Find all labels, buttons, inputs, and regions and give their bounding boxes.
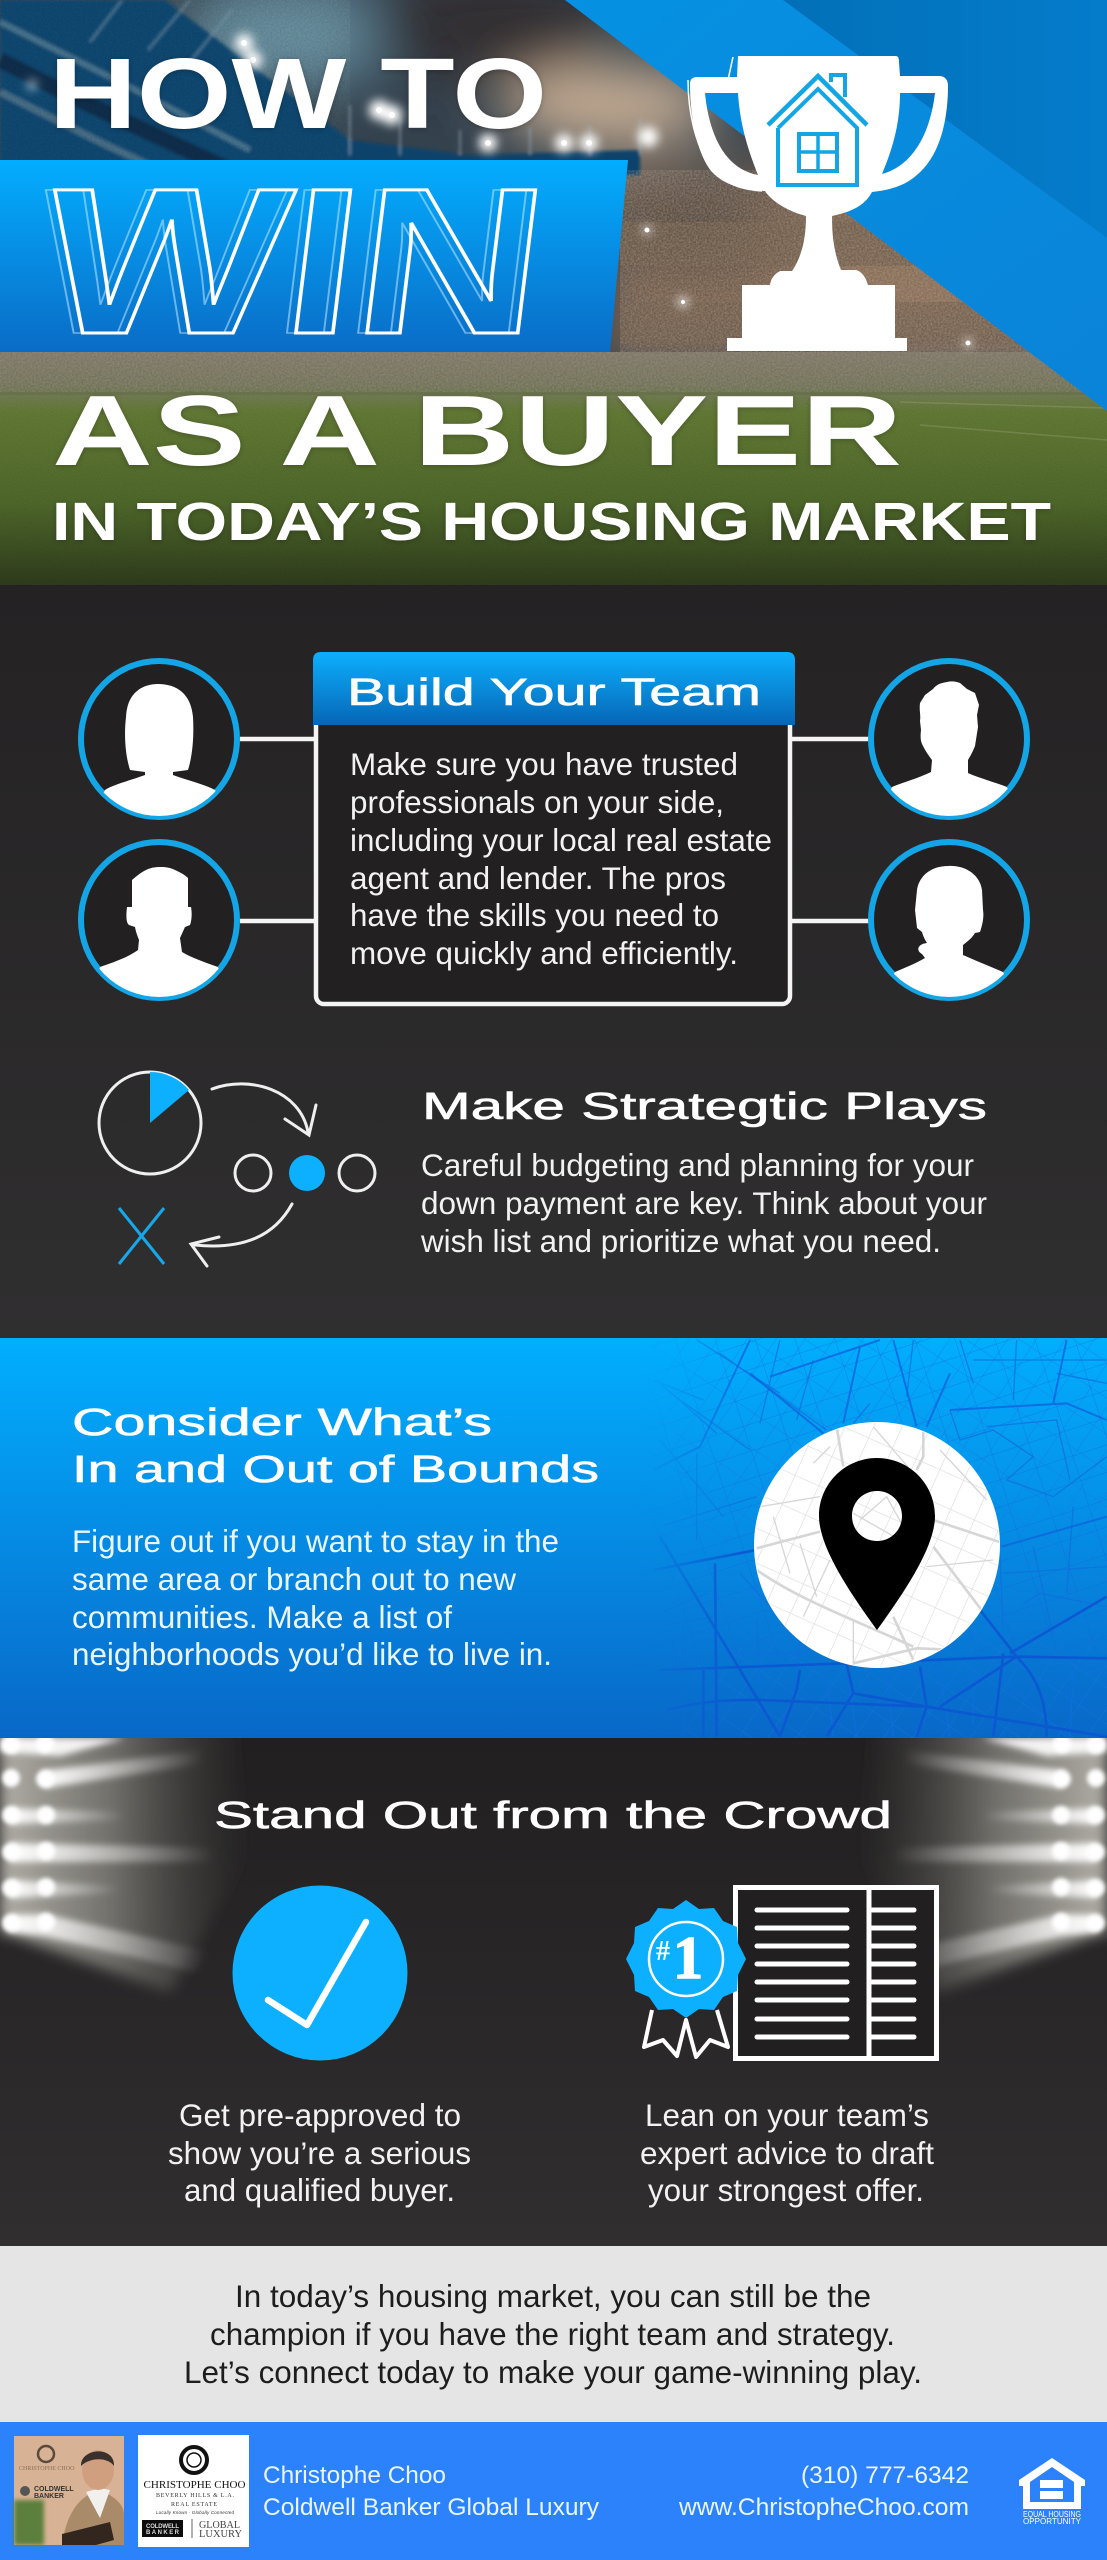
- icon: location pin: [819, 1458, 935, 1630]
- brokerage logo: LUXURY: [199, 2528, 242, 2540]
- stadium lights right: [857, 1725, 1107, 1992]
- body text: team: have the skills you need to: [350, 898, 719, 933]
- text: expert advice: Lean on your team’s: [645, 2098, 929, 2133]
- icon: offer document: [736, 1887, 936, 2059]
- body text: plays: Careful budgeting and planning for your: [421, 1148, 974, 1183]
- body text: team: professionals on your side,: [350, 785, 724, 820]
- phone and website: (310) 777-6342: [801, 2462, 969, 2489]
- ribbon: WIN: WIN: [31, 146, 558, 378]
- body text: team: [350, 747, 772, 971]
- avatar: woman, bottom right: [871, 842, 1027, 1000]
- upper stands: [0, 0, 640, 175]
- blue diagonal banner, darker band: [783, 0, 1107, 238]
- icon: equal housing opportunity: OPPORTUNITY: [1023, 2517, 1082, 2526]
- curved arrow left: [191, 1204, 292, 1266]
- agent name and brokerage: Christophe Choo: [263, 2462, 446, 2489]
- icon: number one ribbon badge: #: [656, 1936, 670, 1967]
- body text: boundaries: same area or branch out to new: [72, 1562, 516, 1597]
- icon: check circle: [232, 1886, 408, 2060]
- body text: plays: wish list and prioritize what you need.: [420, 1224, 941, 1259]
- icon: equal housing opportunity: [1019, 2458, 1085, 2526]
- text: expert advice: expert advice to draft: [640, 2136, 934, 2171]
- body text: team: Make sure you have trusted: [350, 747, 738, 782]
- hero panel: stadium background: [0, 0, 1107, 585]
- X marker: [119, 1208, 164, 1264]
- heading: Consider What's In and Out of Bounds: In and Out of Bounds: [72, 1449, 599, 1491]
- agent photo: [14, 2436, 124, 2545]
- brokerage logo: CHRISTOPHE CHOO: [144, 2479, 246, 2491]
- brokerage logo: COLDWELL: [146, 2524, 179, 2530]
- text: expert advice: your strongest offer.: [648, 2173, 924, 2208]
- text: get pre-approved: and qualified buyer.: [184, 2173, 455, 2208]
- brokerage logo: Locally Known · Globally Connected: [156, 2510, 234, 2515]
- header: Build Your Team: [313, 652, 795, 725]
- heading: IN TODAY'S HOUSING MARKET: IN TODAY’S HOUSING MARKET: [52, 492, 1051, 552]
- connector lines: [240, 739, 870, 921]
- panel: dark team and plays section: [0, 585, 1107, 1338]
- icon: trophy with house: [688, 56, 948, 351]
- map streets: [640, 1338, 1107, 1738]
- panel: blue boundaries section: [0, 1338, 1107, 1738]
- curved arrow right: [212, 1084, 316, 1135]
- avatar: man, top right: [871, 661, 1027, 819]
- pie wedge: [150, 1072, 189, 1123]
- centre marker: [289, 1155, 325, 1191]
- body text: boundaries: communities. Make a list of: [72, 1600, 452, 1635]
- body text: team: agent and lender. The pros: [350, 861, 726, 896]
- body text: boundaries: [72, 1524, 559, 1672]
- agent name and brokerage: [263, 2462, 599, 2521]
- body text: plays: down payment are key. Think about your: [421, 1186, 987, 1221]
- brokerage logo: GLOBAL: [199, 2519, 240, 2531]
- ribbon: WIN: WIN: [22, 146, 549, 378]
- heading: AS A BUYER: AS A BUYER: [52, 375, 902, 487]
- heading: Consider What's In and Out of Bounds: Consider What’s: [72, 1402, 492, 1444]
- header: Build Your Team: Build Your Team: [347, 672, 761, 714]
- brokerage logo: [138, 2435, 249, 2547]
- phone and website: www.ChristopheChoo.com: [678, 2494, 969, 2521]
- agent name and brokerage: Coldwell Banker Global Luxury: [263, 2494, 599, 2521]
- icon: map circle: [750, 1420, 1005, 1670]
- body text: boundaries: neighborhoods you’d like to live in.: [72, 1637, 552, 1672]
- panel: Build Your Team box: [313, 652, 795, 1004]
- agent photo: CHRISTOPHE CHOO: [19, 2466, 75, 2472]
- body text: team: including your local real estate: [350, 823, 772, 858]
- agent photo: BANKER: [34, 2493, 64, 2500]
- heading: Stand Out from the Crowd: Stand Out from the Crowd: [214, 1795, 892, 1837]
- avatar: woman, top left: [81, 661, 237, 819]
- heading: Consider What's In and Out of Bounds: [72, 1402, 599, 1491]
- panel: closing message: [0, 2246, 1107, 2422]
- blue diagonal banner, lighter band: [565, 0, 1107, 411]
- panel: closing message: champion if you have the right team and strategy.: [210, 2317, 895, 2352]
- heading: Make Strategtic Plays: Make Strategtic Plays: [422, 1086, 987, 1128]
- body text: plays: [420, 1148, 987, 1259]
- icon: number one ribbon badge: [626, 1900, 746, 2057]
- icon: play diagram: [99, 1072, 375, 1266]
- icon: equal housing opportunity: EQUAL HOUSING: [1023, 2510, 1081, 2519]
- text: get pre-approved: Get pre-approved to: [179, 2098, 461, 2133]
- panel: closing message: In today’s housing market, you can still be the: [235, 2279, 871, 2314]
- brokerage logo: BEVERLY HILLS & L.A.: [156, 2493, 234, 2499]
- text: get pre-approved: [168, 2098, 471, 2208]
- avatar: man, bottom left: [81, 842, 237, 1000]
- brokerage logo: BANKER: [146, 2530, 180, 2536]
- footer panel: [0, 2422, 1107, 2560]
- panel: dark stand out section: [0, 1738, 1107, 2246]
- phone and website: [678, 2462, 969, 2521]
- body text: boundaries: Figure out if you want to stay in the: [72, 1524, 559, 1559]
- stadium lights left: [0, 1725, 250, 1992]
- text: get pre-approved: show you’re a serious: [168, 2136, 471, 2171]
- ribbon: WIN: [0, 146, 628, 378]
- text: expert advice: [640, 2098, 934, 2208]
- brokerage logo: REAL ESTATE: [171, 2502, 217, 2508]
- icon: number one ribbon badge: 1: [673, 1925, 703, 1991]
- heading: HOW TO: HOW TO: [49, 38, 547, 150]
- panel: closing message: Let’s connect today to make your game-winning play.: [184, 2355, 922, 2390]
- body text: team: move quickly and efficiently.: [350, 936, 738, 971]
- agent photo: COLDWELL: [34, 2486, 74, 2493]
